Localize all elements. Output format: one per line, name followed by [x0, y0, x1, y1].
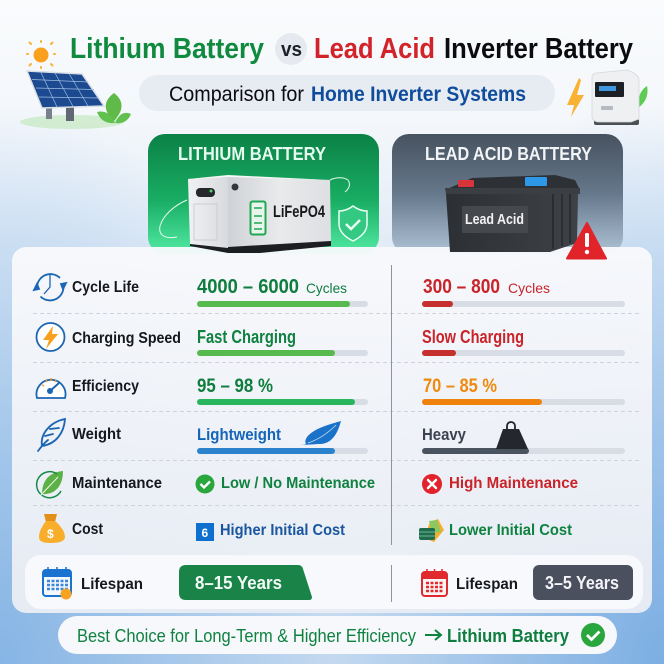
panel: lithium header — [148, 134, 379, 254]
value: higher cost: Higher Initial Cost — [220, 522, 346, 539]
bar: lead cycles — [422, 301, 625, 307]
bar: lithium cycles — [197, 301, 368, 307]
image: lead acid battery: Lead Acid — [465, 211, 524, 228]
bar: heavy — [422, 448, 625, 454]
callout: best choice — [58, 616, 617, 654]
subtitle pill: Comparison for — [169, 83, 304, 106]
row: charging speed — [36, 323, 625, 356]
callout: best choice: Lithium Battery — [447, 626, 569, 646]
image: lead acid battery — [445, 175, 580, 252]
icon: blue tag: 6 — [202, 526, 208, 540]
badge: 3-5 years — [533, 565, 633, 600]
panel: lead acid header — [392, 134, 623, 254]
badge: 3-5 years: 3–5 Years — [545, 573, 619, 593]
label: lead lifespan: Lifespan — [456, 576, 518, 593]
title — [70, 33, 633, 65]
label: cost: Cost — [72, 521, 104, 538]
image: LiFePO4 battery: LiFePO4 — [273, 202, 325, 221]
icon: check badge — [581, 623, 605, 647]
icon: blue feather — [299, 421, 341, 445]
icon: warning triangle — [567, 223, 606, 258]
icon: blue tag — [196, 523, 214, 541]
title: Lead Acid — [314, 33, 435, 65]
label: charging speed: Charging Speed — [72, 330, 181, 347]
title: Lithium Battery — [70, 33, 264, 65]
icon: feather outline — [38, 419, 65, 451]
heading: lead acid battery: LEAD ACID BATTERY — [425, 144, 592, 164]
badge: 8-15 years: 8–15 Years — [195, 573, 282, 593]
heading: lithium battery: LITHIUM BATTERY — [178, 144, 326, 164]
image: LiFePO4 battery — [160, 175, 349, 253]
panel: comparison table — [12, 247, 652, 613]
unit: lead cycles: Cycles — [508, 280, 550, 296]
subtitle pill — [139, 75, 555, 111]
value: lead cycles: 300 – 800 — [423, 276, 500, 298]
badge: 8-15 years — [179, 565, 312, 600]
icon: solar panel with leaves — [20, 71, 131, 129]
row: weight — [38, 419, 625, 454]
icon: clock cycle — [34, 274, 66, 300]
row: efficiency — [36, 376, 625, 405]
value: high maintenance: High Maintenance — [449, 475, 578, 492]
icon: lightning bolt — [567, 78, 584, 117]
value: lead efficiency: 70 – 85 % — [423, 376, 497, 397]
value: lower cost: Lower Initial Cost — [449, 522, 573, 539]
value: lithium cycles: 4000 – 6000 — [197, 276, 299, 298]
value: heavy: Heavy — [422, 425, 466, 444]
bar: lightweight — [197, 448, 368, 454]
arrow — [425, 630, 441, 640]
icon: cash stack — [419, 519, 444, 542]
icon: money bag: $ — [47, 527, 54, 541]
callout: best choice: Best Choice for Long-Term & Higher Efficiency — [77, 626, 416, 646]
icon: charging bolt — [36, 323, 64, 351]
title: vs — [281, 39, 302, 61]
icon: shield check — [339, 206, 367, 241]
bar: slow charging — [422, 350, 625, 356]
icon: red calendar — [422, 569, 447, 596]
bar: lithium efficiency — [197, 399, 368, 405]
unit: lithium cycles: Cycles — [306, 280, 347, 296]
title: Inverter Battery — [444, 33, 633, 65]
value: lithium efficiency: 95 – 98 % — [197, 376, 273, 397]
panel: lifespan card — [25, 555, 643, 609]
icon: money bag — [39, 514, 65, 543]
bar: fast charging — [197, 350, 368, 356]
icon: green check — [196, 474, 214, 494]
label: maintenance: Maintenance — [72, 475, 162, 492]
row: maintenance — [37, 471, 578, 498]
label: weight: Weight — [72, 426, 122, 443]
row: cycle life — [34, 274, 625, 307]
label: lithium lifespan: Lifespan — [81, 576, 143, 593]
icon: weight — [496, 422, 528, 449]
value: slow charging: Slow Charging — [422, 327, 524, 347]
icon: inverter — [592, 70, 648, 125]
value: low maintenance: Low / No Maintenance — [221, 475, 375, 492]
row: cost — [39, 514, 573, 543]
subtitle pill: Home Inverter Systems — [311, 83, 526, 106]
label: efficiency: Efficiency — [72, 378, 139, 395]
bar: lead efficiency — [422, 399, 625, 405]
icon: red cross — [422, 474, 442, 494]
icon: blue calendar — [43, 567, 72, 600]
dividers — [33, 265, 640, 545]
icon: gauge — [36, 378, 66, 398]
icon: sun — [27, 41, 55, 68]
value: fast charging: Fast Charging — [197, 327, 296, 347]
value: lightweight: Lightweight — [197, 425, 281, 444]
label: cycle life: Cycle Life — [72, 279, 139, 296]
icon: leaf — [37, 471, 63, 498]
